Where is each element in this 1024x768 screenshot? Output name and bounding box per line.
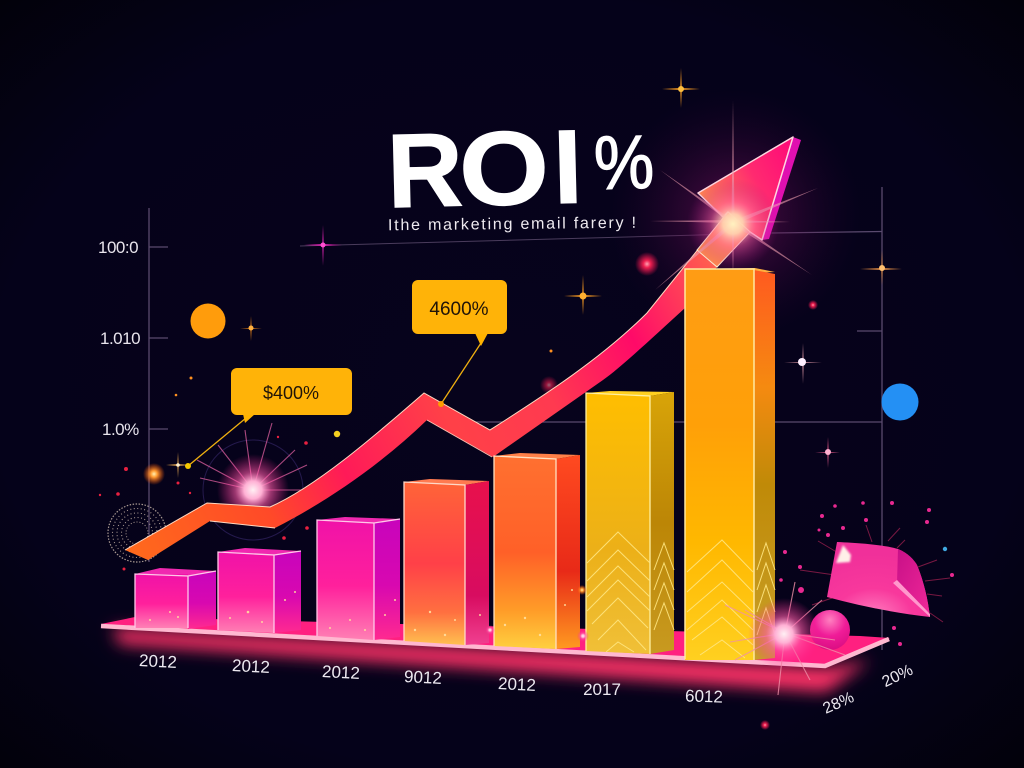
title: O: [458, 109, 550, 228]
x-axis labels: 28%: [821, 689, 857, 718]
glowing orbs: [143, 252, 818, 730]
pink rays around gem: [800, 525, 950, 622]
bar 4: [404, 479, 489, 645]
callout: right: 4600%: [429, 299, 489, 320]
title: I: [552, 109, 584, 226]
arrow tip flare: [650, 100, 818, 290]
platform surface: [101, 617, 890, 664]
bar 7: [685, 268, 775, 660]
gem body: [827, 542, 930, 617]
gem facet highlight: [893, 580, 930, 617]
ribbon highlights: [125, 212, 728, 550]
title: [386, 107, 655, 230]
bar 2: [218, 548, 301, 633]
axis labels: [98, 238, 140, 439]
bar 3: [317, 517, 400, 640]
x-axis labels: [139, 651, 916, 718]
gem side facet: [897, 549, 930, 617]
sparkle: small orange: [240, 316, 262, 341]
x-axis labels: 2012: [139, 651, 177, 672]
bar sparkles: [149, 589, 573, 636]
bar 1: [135, 568, 216, 629]
axis labels: 1.0%: [102, 420, 139, 439]
axis labels: 100:0: [98, 238, 138, 257]
axis labels: 1.010: [100, 329, 140, 348]
title: %: [593, 120, 655, 206]
platform glow: [112, 628, 870, 692]
gem: [827, 542, 930, 617]
ribbon shaft: [125, 212, 750, 560]
burst: left: [197, 423, 310, 540]
arrow glow haze: [610, 90, 860, 340]
dotted torus: [108, 504, 166, 562]
sparkles: [166, 68, 902, 478]
gem shine: [836, 545, 851, 563]
left axis: [149, 208, 168, 562]
sparkle: pink: [815, 437, 840, 468]
subtitle: Ithe marketing email farery !: [388, 215, 636, 234]
sparkle: orange mid: [564, 275, 602, 315]
burst: right: [725, 582, 845, 695]
right axis and grid lines: [300, 187, 882, 650]
chevrons: [587, 532, 674, 652]
arrow joint: [697, 212, 750, 267]
x-axis labels: 2012: [498, 674, 536, 695]
bar junction lights: [485, 585, 589, 642]
x-axis labels: 2012: [232, 656, 270, 677]
platform edge: [101, 626, 889, 666]
decorative circle: blue: [882, 384, 918, 420]
sparkle: white pink: [784, 343, 822, 384]
callout: left: $400%: [263, 383, 319, 403]
x-axis labels: 2012: [322, 662, 360, 683]
arrow ribbon: [125, 137, 801, 560]
sparkle: right axis: [860, 250, 902, 285]
decorative circle: orange: [190, 304, 226, 338]
bar 5: [494, 453, 580, 649]
x-axis labels: 9012: [404, 667, 442, 688]
x-axis labels: 6012: [685, 686, 723, 707]
sparkle: top gold: [662, 68, 700, 108]
platform: [101, 617, 890, 692]
sphere: [810, 610, 850, 650]
bar 6: [586, 391, 674, 654]
callout: right: [412, 280, 507, 407]
x-axis labels: 2017: [583, 680, 621, 699]
arrow head: [762, 137, 801, 240]
x-axis labels: 20%: [880, 662, 916, 691]
particles: [99, 321, 954, 646]
sparkle: magenta: [304, 225, 342, 266]
sparkle: near callout dot: [166, 452, 190, 478]
callout: left: [185, 368, 352, 469]
title: R: [386, 112, 464, 230]
chevrons: [687, 540, 775, 658]
bars: [135, 268, 775, 660]
